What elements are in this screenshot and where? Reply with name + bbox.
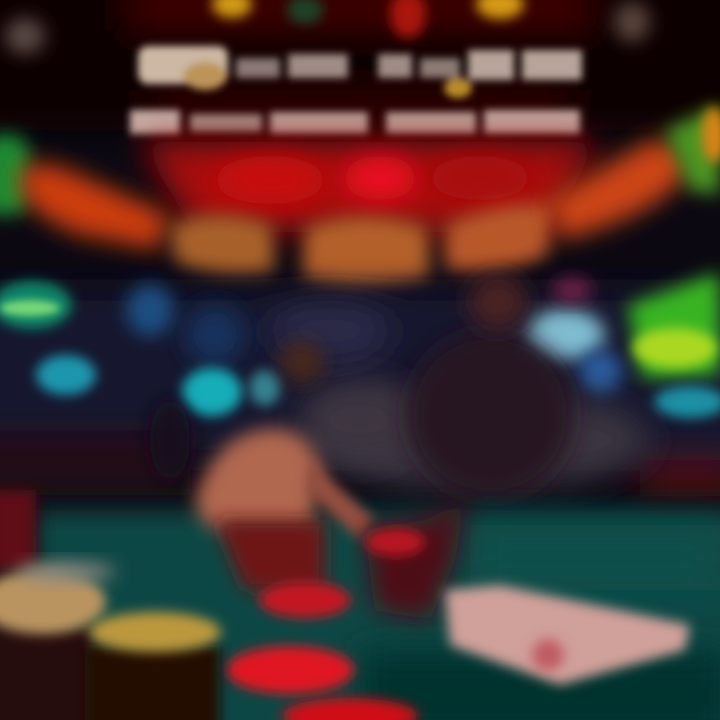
foreground player (150, 340, 465, 620)
background player (300, 274, 650, 499)
red banner (140, 142, 600, 232)
ceiling lights (5, 0, 650, 54)
playing cards (445, 585, 690, 685)
background: room (0, 290, 720, 496)
drinks and stools (0, 490, 221, 720)
background: ceiling (0, 0, 720, 140)
lantern row (0, 105, 720, 286)
red chips (226, 582, 418, 720)
table (35, 510, 720, 720)
screens and glow (0, 272, 720, 418)
title: blurred heading blocks (130, 46, 582, 134)
